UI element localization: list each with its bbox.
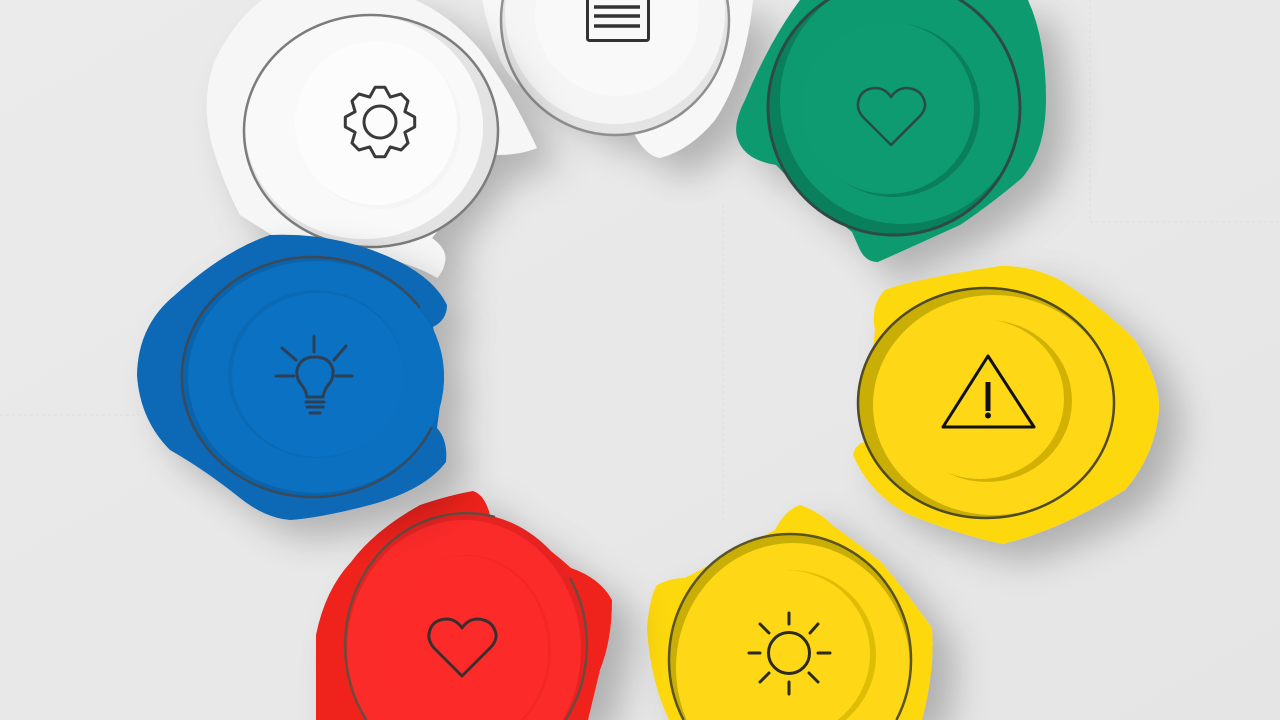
badge: heart (green) <box>736 0 1046 262</box>
badge: document (white) <box>482 0 753 158</box>
ring: document badge outline <box>501 0 729 135</box>
disc: red badge rim <box>345 513 587 720</box>
icon: document <box>588 0 648 40</box>
ring: blue badge outline <box>182 257 432 497</box>
badge: heart (red) <box>316 491 612 720</box>
badge: gear (white) <box>207 0 537 278</box>
disc: document badge rim <box>501 0 729 135</box>
badge: warning (yellow) <box>853 266 1159 544</box>
blob: gear badge backing <box>207 0 537 278</box>
disc: warning badge rim <box>858 288 1114 518</box>
icon: gear <box>345 87 415 157</box>
icon: green heart <box>858 88 925 145</box>
blob: blue badge backing <box>137 235 447 520</box>
blob: red badge backing <box>316 491 612 720</box>
ring: green badge outline <box>768 0 1020 235</box>
blob: warning badge backing <box>853 266 1159 544</box>
disc: blue badge rim <box>182 257 444 497</box>
icon: lightbulb <box>276 336 352 413</box>
icon: red heart <box>429 619 496 676</box>
disc: green badge rim <box>768 0 1020 235</box>
badge: sun (yellow) <box>647 505 933 720</box>
ring: gear badge outline <box>244 15 498 247</box>
ring: red badge outline <box>345 513 587 720</box>
blob: document badge backing <box>482 0 753 158</box>
disc: sun badge rim <box>669 534 911 720</box>
ring: sun badge outline <box>669 534 911 720</box>
blob: green badge backing <box>736 0 1046 262</box>
icon: sun <box>749 613 830 694</box>
blob: sun badge backing <box>647 505 933 720</box>
icon: warning triangle <box>943 356 1034 427</box>
badge: lightbulb (blue) <box>137 235 447 520</box>
disc: gear badge rim <box>244 15 498 247</box>
ring: warning badge outline <box>858 288 1114 518</box>
